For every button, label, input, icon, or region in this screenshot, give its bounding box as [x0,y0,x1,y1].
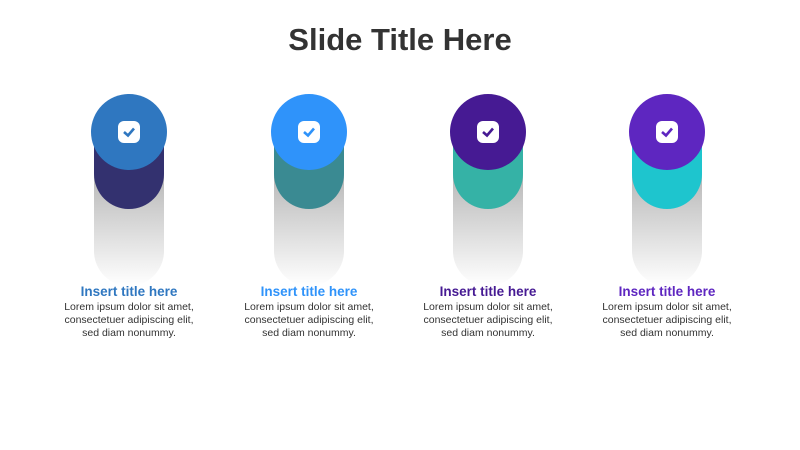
text 3: Lorem ipsum dolor sit amet, [423,301,553,313]
icon: circle check 4 [629,94,705,170]
icon: circle check 2 [271,94,347,170]
heading 4: Insert title here [619,284,715,299]
text 4 [602,301,732,339]
text 1: sed diam nonummy. [82,327,176,339]
column 2 [244,94,374,339]
text 2 [244,301,374,339]
text 4: consectetuer adipiscing elit, [602,314,732,326]
text 3: sed diam nonummy. [441,327,535,339]
text 3 [423,301,553,339]
column 1 [64,94,194,339]
heading 1: Insert title here [81,284,177,299]
heading 3: Insert title here [440,284,536,299]
text 4: sed diam nonummy. [620,327,714,339]
text 1: Lorem ipsum dolor sit amet, [64,301,194,313]
title: Slide Title Here [288,22,512,57]
column 3 [423,94,553,339]
icon: circle check 3 [450,94,526,170]
text 2: consectetuer adipiscing elit, [244,314,374,326]
icon: circle check 1 [91,94,167,170]
text 2: Lorem ipsum dolor sit amet, [244,301,374,313]
text 3: consectetuer adipiscing elit, [424,314,552,326]
column 4 [602,94,732,339]
heading 2: Insert title here [261,284,357,299]
text 1 [64,301,194,339]
text 1: consectetuer adipiscing elit, [64,314,194,326]
text 2: sed diam nonummy. [262,327,356,339]
text 4: Lorem ipsum dolor sit amet, [602,301,732,313]
